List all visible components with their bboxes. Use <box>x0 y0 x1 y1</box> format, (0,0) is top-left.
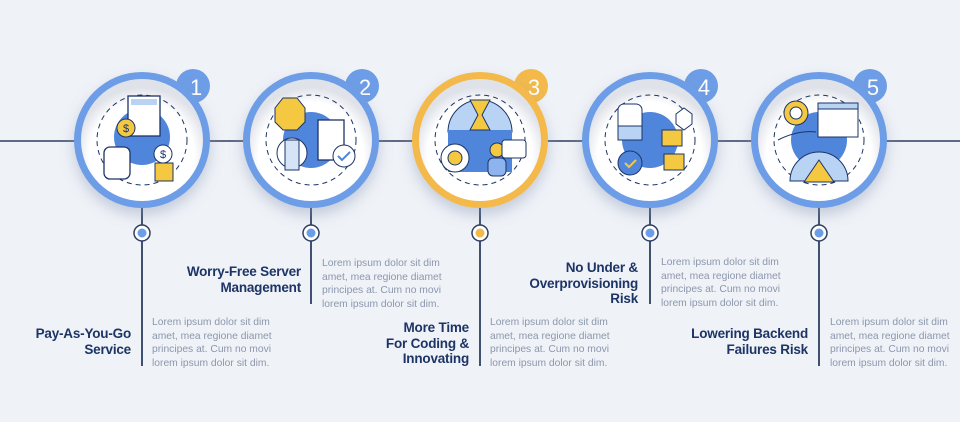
title 2: Worry-Free Server <box>187 264 301 279</box>
circle 1: 1 <box>190 75 202 100</box>
circle 4 <box>582 69 718 208</box>
title 4 <box>529 260 638 306</box>
title 2 <box>186 264 302 295</box>
title 1: Pay-As-You-Go <box>36 326 131 341</box>
circle 1 <box>74 69 210 208</box>
title 4: Risk <box>610 291 638 306</box>
circle 2: 2 <box>359 75 371 100</box>
circle 5: 5 <box>867 75 879 100</box>
title 3 <box>386 320 469 366</box>
title 3: Innovating <box>403 351 469 366</box>
circle 2 <box>243 69 379 208</box>
circle 3: 3 <box>528 75 540 100</box>
title 5: Lowering Backend <box>691 326 808 341</box>
title 5 <box>691 326 808 356</box>
title 4: Overprovisioning <box>529 276 638 290</box>
text 5: Lorem ipsum dolor sit dim amet, mea regione diamet principes at. Cum no movi lorem ipsum dolor sit dim. <box>830 317 950 369</box>
circle 1: $ <box>123 123 129 135</box>
circle 4: 4 <box>698 75 710 100</box>
title 4: No Under & <box>566 260 638 275</box>
text 2: Lorem ipsum dolor sit dim amet, mea regione diamet principes at. Cum no movi lorem ipsum dolor sit dim. <box>322 258 442 310</box>
circle 5 <box>751 69 887 208</box>
title 1: Service <box>84 342 131 356</box>
title 3: For Coding & <box>386 336 469 350</box>
text 3: Lorem ipsum dolor sit dim amet, mea regione diamet principes at. Cum no movi lorem ipsum dolor sit dim. <box>490 317 610 369</box>
title 1 <box>36 326 131 356</box>
circle 3 <box>412 69 548 208</box>
circle 1: $ <box>160 149 166 161</box>
title 2: Management <box>220 280 301 294</box>
node dots <box>134 225 827 241</box>
text 1: Lorem ipsum dolor sit dim amet, mea regione diamet principes at. Cum no movi lorem ipsum dolor sit dim. <box>152 317 272 369</box>
title 3: More Time <box>404 320 469 335</box>
text 4: Lorem ipsum dolor sit dim amet, mea regione diamet principes at. Cum no movi lorem ipsum dolor sit dim. <box>661 257 781 309</box>
title 5: Failures Risk <box>727 342 808 356</box>
